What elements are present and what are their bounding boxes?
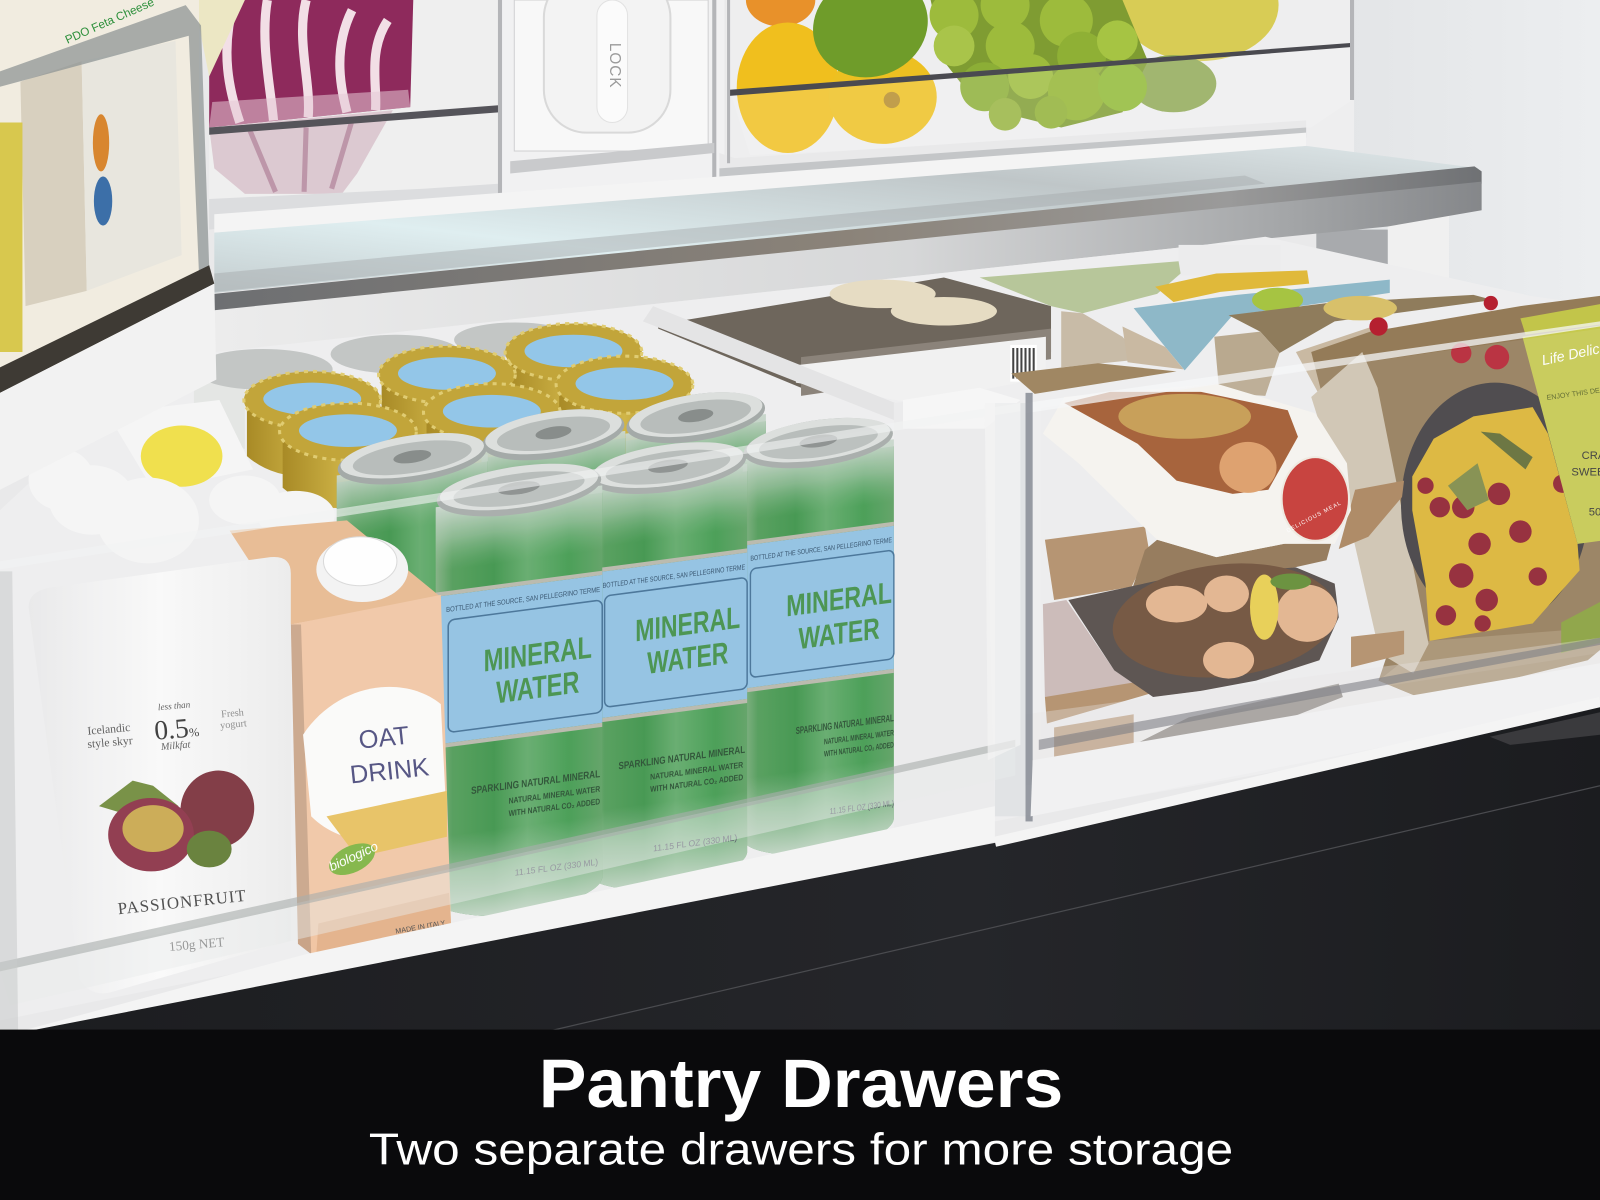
oat drink carton: biologico — [327, 838, 380, 874]
lower trays — [1043, 600, 1145, 697]
can 1: 11.15 FL OZ (330 ML) — [515, 857, 598, 878]
white door shelf — [0, 284, 216, 490]
passionfruit pouch — [29, 557, 291, 993]
lock panel — [500, 0, 724, 199]
can 2: 11.15 FL OZ (330 ML) — [653, 832, 737, 853]
front row mineral water cans — [436, 410, 894, 928]
can 2: BOTTLED AT THE SOURCE, SAN PELLEGRINO TERME — [603, 563, 745, 590]
kraft under sleeve — [1130, 531, 1335, 597]
left door bin with feta box — [0, 0, 214, 393]
green sleeve — [980, 261, 1181, 313]
pouch text: Fresh — [221, 707, 244, 720]
can 1: SPARKLING NATURAL MINERAL — [471, 769, 601, 797]
right drawer back packages — [658, 261, 1493, 408]
carton text — [345, 720, 430, 790]
can 2: WITH NATURAL CO₂ ADDED — [650, 773, 743, 794]
oat drink carton — [230, 520, 451, 954]
pouch text: yogurt — [220, 718, 247, 732]
pouch text: Milkfat — [160, 739, 192, 753]
bottom caption band — [0, 1030, 1600, 1200]
pouch text: less than — [157, 699, 191, 712]
back row cans — [337, 384, 766, 888]
can 2: MINERAL — [635, 600, 740, 649]
kraft box right — [1339, 481, 1404, 549]
pasta sleeve — [1043, 384, 1351, 557]
cap — [316, 537, 408, 602]
lock label: LOCK — [606, 43, 623, 89]
right interior wall — [1316, 0, 1600, 306]
right drawer meals — [1011, 296, 1600, 757]
can 3: NATURAL MINERAL WATER — [824, 728, 894, 747]
can 1: MINERAL — [484, 630, 592, 679]
pouch text — [87, 699, 248, 954]
pouch text: 150g NET — [168, 934, 225, 954]
shrimp photo — [1068, 567, 1339, 697]
can 2: SPARKLING NATURAL MINERAL — [618, 745, 745, 772]
left drawer right wall and divider — [643, 306, 1020, 839]
clear trays and forks — [1311, 352, 1429, 673]
grey sleeve — [1130, 684, 1343, 747]
pouch text: style skyr — [87, 734, 133, 751]
blue sleeve — [1134, 280, 1390, 370]
black lower cabinet panel — [20, 702, 1600, 1033]
pouch text: 0.5% — [153, 711, 200, 746]
can 3: 11.15 FL OZ (330 ML) — [830, 798, 894, 816]
left drawer lip and floor — [15, 806, 995, 1033]
frying pan — [1401, 383, 1589, 628]
gold jars — [244, 323, 693, 508]
pouch text: PASSIONFRUIT — [117, 886, 248, 918]
big wood sleeve — [1311, 296, 1600, 700]
can 2: WATER — [647, 636, 728, 681]
right drawer meals: DELICIOUS MEAL — [1286, 500, 1343, 534]
can 3: WATER — [799, 612, 880, 656]
can 1: WITH NATURAL CO₂ ADDED — [509, 796, 600, 818]
wood sleeve — [1229, 295, 1493, 353]
barcode — [1010, 345, 1037, 382]
right transparent drawer front — [995, 321, 1600, 821]
top front package strip — [1011, 363, 1177, 394]
can 3: WITH NATURAL CO₂ ADDED — [824, 740, 894, 759]
can 1: NATURAL MINERAL WATER — [509, 784, 600, 806]
fruit bin — [719, 0, 1354, 182]
can 1: BOTTLED AT THE SOURCE, SAN PELLEGRINO TERME — [446, 585, 600, 614]
red seal — [1282, 457, 1349, 541]
omelette — [1412, 407, 1580, 641]
subtitle: Two separate drawers for more storage — [369, 1123, 1233, 1174]
shelf — [214, 133, 1482, 352]
carton text: DRINK — [349, 753, 430, 790]
back of pantry interior — [0, 237, 1600, 1020]
passionfruit illustration — [99, 762, 263, 871]
can 3: BOTTLED AT THE SOURCE, SAN PELLEGRINO TERME — [750, 537, 892, 563]
pouch text: Icelandic — [87, 721, 131, 738]
corn sleeve — [1155, 270, 1309, 302]
title: Pantry Drawers — [539, 1046, 1063, 1122]
oat drink carton: MADE IN ITALY — [395, 919, 446, 936]
kraft box left — [1045, 527, 1149, 600]
radicchio in crisper bin — [194, 0, 500, 230]
carton text: OAT — [357, 722, 411, 755]
can 3: SPARKLING NATURAL MINERAL — [796, 713, 894, 737]
can 2: NATURAL MINERAL WATER — [650, 760, 743, 782]
can 2 — [589, 434, 747, 901]
can 1 — [436, 455, 602, 928]
can 3 — [743, 410, 894, 866]
left transparent drawer front — [0, 403, 1020, 1051]
grapes — [930, 0, 1148, 131]
green label — [1522, 326, 1600, 544]
can 1: WATER — [496, 665, 579, 710]
milk bottles caps — [29, 400, 335, 563]
can 3: MINERAL — [786, 576, 892, 624]
rear silver cans — [194, 322, 577, 449]
